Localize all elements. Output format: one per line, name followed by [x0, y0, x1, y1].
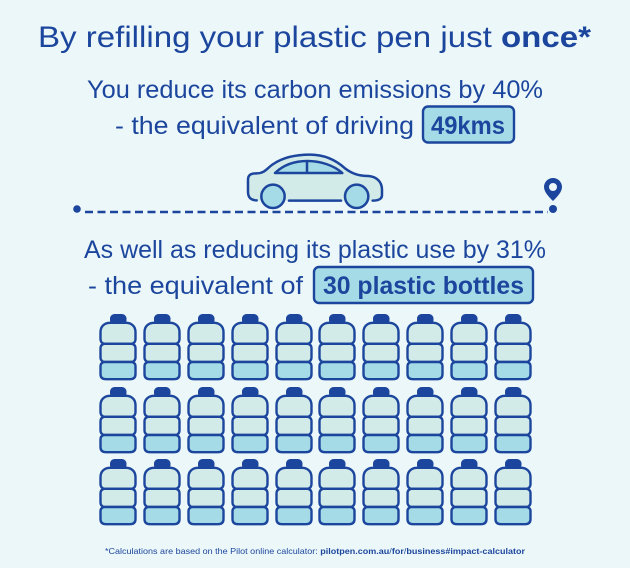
driving equivalent text: - the equivalent of driving: [115, 112, 414, 140]
bottles equivalent text: - the equivalent of: [88, 272, 303, 300]
bottles row 1: [100, 314, 530, 379]
callout: 49kms: [423, 106, 514, 142]
carbon emissions statement: You reduce its carbon emissions by 40%: [87, 76, 543, 104]
footnote: *Calculations are based on the Pilot online calculator: pilotpen.com.au /for/business#impact-calculator: [105, 546, 526, 556]
callout: 30 plastic bottles: 30 plastic bottles: [323, 272, 524, 300]
bottles row 3: [100, 459, 530, 524]
callout: 49kms: 49kms: [431, 112, 505, 140]
icon: location pin: [544, 178, 562, 201]
bottles row 2: [100, 387, 530, 452]
route line: [73, 205, 557, 213]
icon: car: [248, 155, 382, 208]
title: By refilling your plastic pen just once*: [38, 21, 591, 54]
plastic use statement: As well as reducing its plastic use by 31%: [84, 236, 546, 264]
